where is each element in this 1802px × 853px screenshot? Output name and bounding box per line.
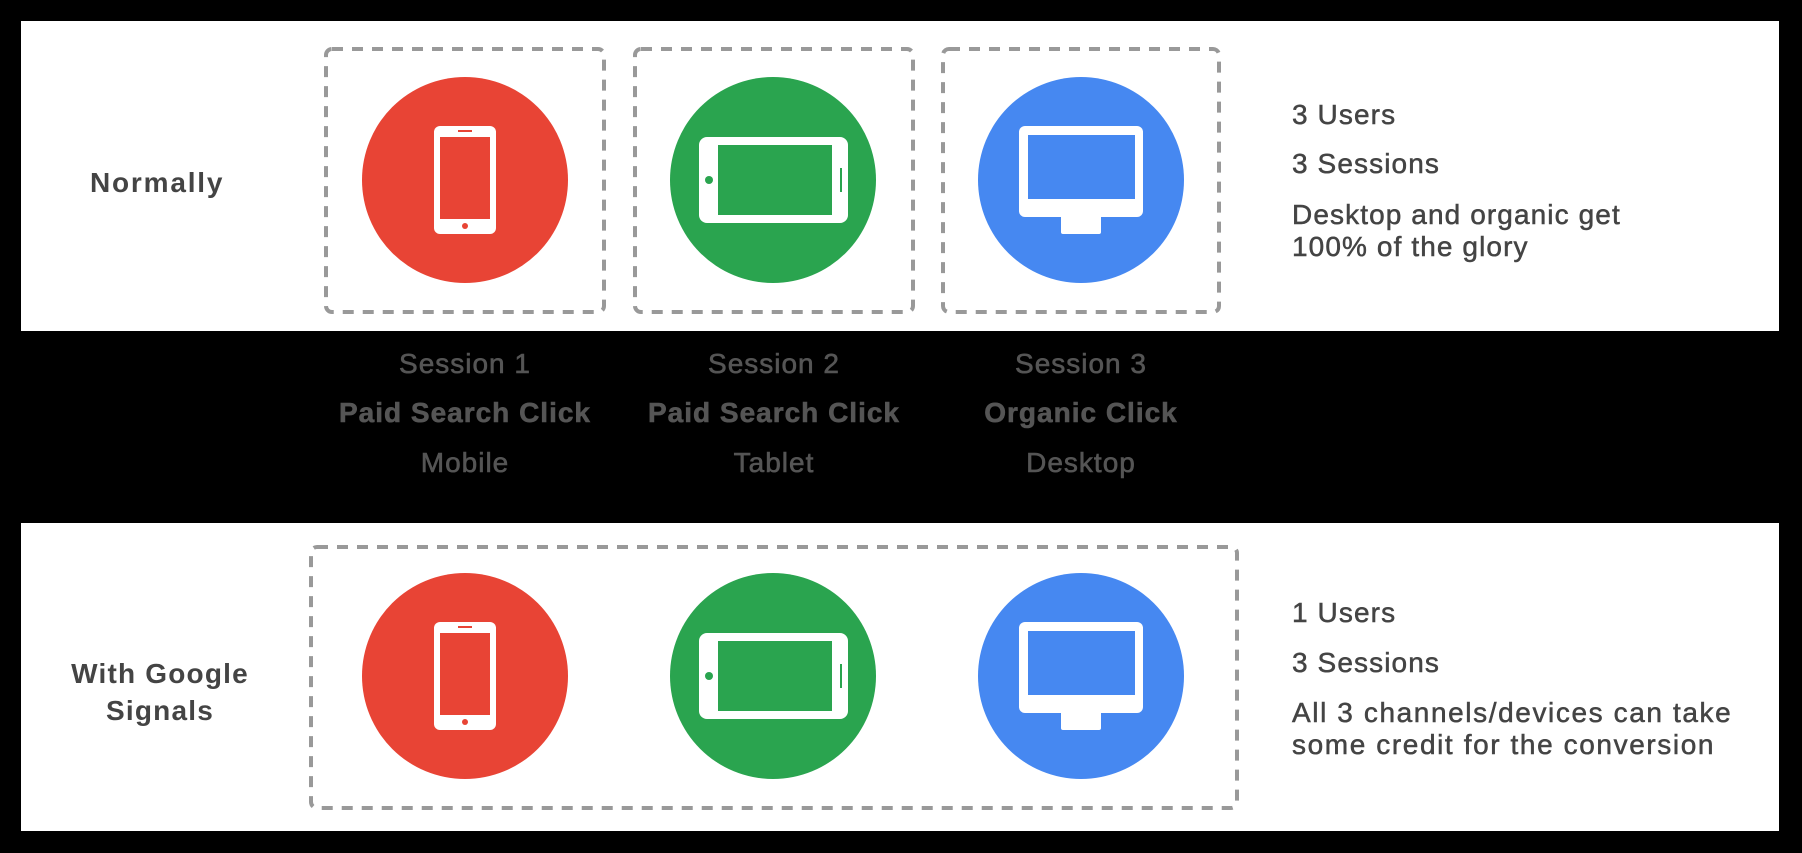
label: session 2: Session 2 [708,348,840,379]
icon: tablet [670,77,876,283]
stats text: normally: 100% of the glory [1292,231,1529,262]
stats text: normally: 3 Users [1292,99,1396,130]
heading: Normally: Normally [90,167,224,198]
stats text: google signals: 1 Users [1292,597,1396,628]
label: session 1: Session 1 [399,348,531,379]
icon: tablet [670,573,876,779]
label: session 3 [984,348,1178,478]
label: session 2: Tablet [734,447,814,478]
combined session box [311,547,1237,808]
label: session 1: Paid Search Click [339,397,591,428]
icon: desktop [978,77,1184,283]
heading: With Google Signals: With Google [71,658,249,689]
stats text: google signals: 3 Sessions [1292,647,1440,678]
heading: With Google Signals: Signals [106,695,214,726]
session labels [339,348,1178,478]
panel: with google signals [21,523,1779,831]
session box 2 [635,49,913,312]
stats text: google signals: some credit for the conversion [1292,729,1715,760]
icon: desktop [978,573,1184,779]
icon: mobile [362,77,568,283]
label: session 2 [648,348,900,478]
session box 3 [943,49,1219,312]
session box 1 [326,49,604,312]
label: session 3: Session 3 [1015,348,1147,379]
stats text: normally: 3 Sessions [1292,148,1440,179]
icon: mobile [362,573,568,779]
stats text: google signals [1292,597,1732,760]
label: session 3: Organic Click [984,397,1178,428]
label: session 1: Mobile [421,447,509,478]
label: session 2: Paid Search Click [648,397,900,428]
label: session 1 [339,348,591,478]
stats text: normally: Desktop and organic get [1292,199,1621,230]
stats text: google signals: All 3 channels/devices can take [1292,697,1732,728]
panel: normally [21,21,1779,331]
stats text: normally [1292,99,1621,262]
label: session 3: Desktop [1026,447,1136,478]
